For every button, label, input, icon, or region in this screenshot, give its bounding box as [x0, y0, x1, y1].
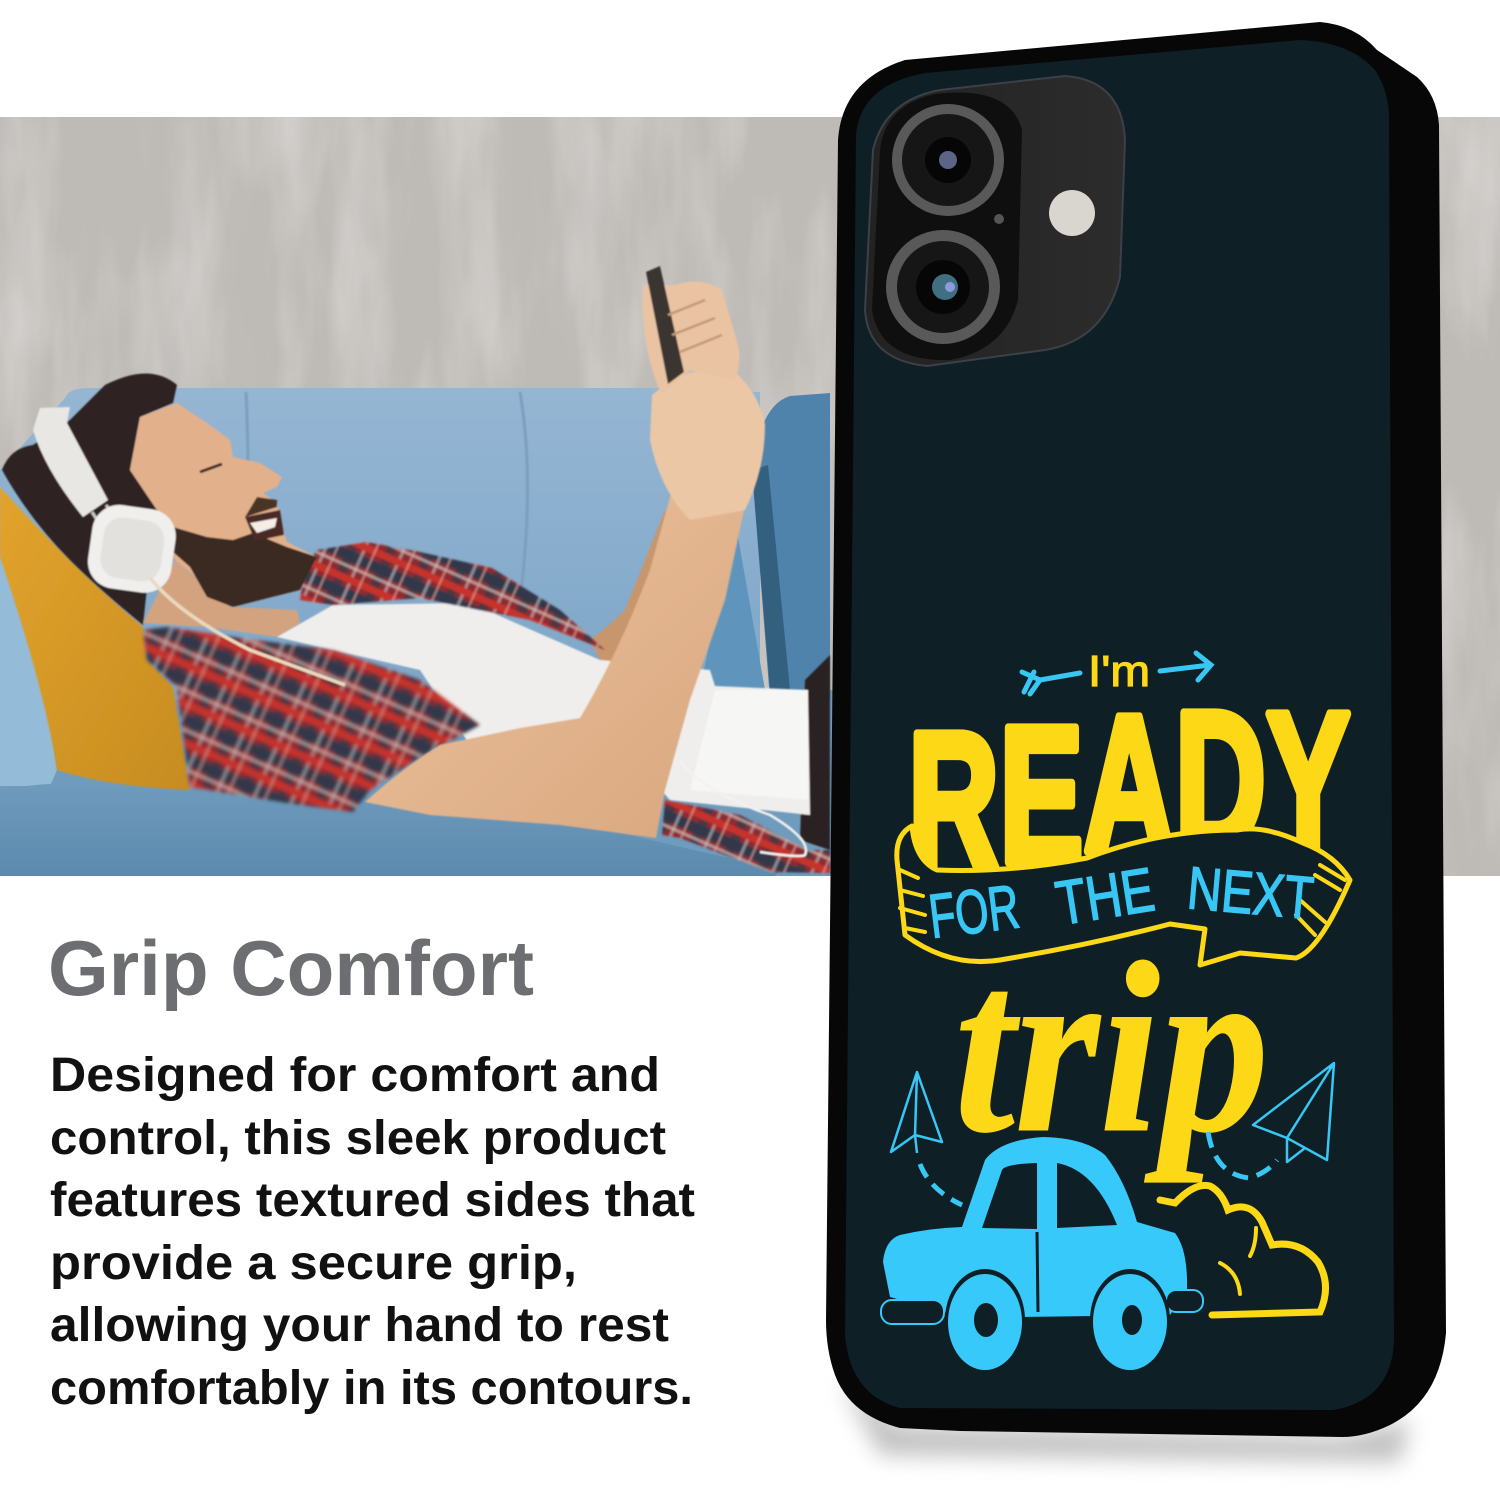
sofa [0, 388, 835, 876]
FOR THE NEXT lettering: NEXT [1185, 854, 1316, 932]
ribbon hatch [900, 865, 1345, 935]
I'm lettering: I'm [1088, 647, 1150, 696]
neck [143, 560, 300, 637]
back arm [590, 510, 700, 680]
windows [982, 1163, 1117, 1229]
lifestyle photo: man on sofa [0, 117, 1500, 876]
door line [1037, 1232, 1038, 1312]
near arm [365, 490, 745, 838]
plaid sleeve [143, 627, 480, 812]
man [2, 266, 830, 873]
microphone dot [994, 214, 1004, 224]
FOR THE NEXT lettering: FOR [925, 872, 1023, 952]
face [130, 403, 317, 607]
dashed trail right [1208, 1132, 1277, 1178]
shirt tail [662, 800, 830, 873]
FOR THE NEXT lettering [925, 854, 1316, 952]
top lens [892, 104, 1004, 216]
white t-shirt [277, 603, 810, 815]
upper hand [643, 281, 739, 395]
exhaust cloud [1160, 1185, 1326, 1315]
bottom lens [886, 230, 1000, 344]
trip lettering: trip [954, 912, 1269, 1184]
teeth [250, 518, 277, 533]
beard [157, 510, 317, 607]
description text: allowing your hand to rest [50, 1299, 669, 1352]
description text: control, this sleek product [50, 1112, 666, 1165]
moustache [245, 497, 277, 517]
lower fist [650, 370, 765, 520]
case body [826, 22, 1446, 1437]
left wheel [945, 1269, 1025, 1371]
ribbon banner [897, 826, 1350, 965]
mustard pillow [0, 487, 190, 790]
description text [50, 1049, 695, 1415]
FOR THE NEXT lettering: THE [1051, 855, 1159, 939]
case shadow [840, 1380, 1410, 1462]
lens island [872, 92, 1022, 360]
headphones [33, 407, 345, 685]
wall background [0, 117, 1500, 876]
artwork [881, 647, 1350, 1371]
description text: Designed for comfort and [50, 1049, 660, 1102]
mouth [245, 510, 284, 541]
description text: comfortably in its contours. [50, 1362, 693, 1415]
flash [1049, 190, 1095, 236]
READY lettering: READY [908, 670, 1350, 910]
camera plate [865, 76, 1125, 366]
held phone [646, 266, 684, 384]
front bumper [881, 1300, 944, 1324]
arrow right [1160, 653, 1211, 680]
dashed trail left [920, 1164, 962, 1205]
earphone cable [680, 760, 806, 856]
car [881, 1137, 1203, 1371]
shirt collar and placket [300, 542, 605, 650]
description text: provide a secure grip, [50, 1237, 577, 1290]
description text: features textured sides that [50, 1174, 695, 1227]
heading: Grip Comfort [48, 924, 534, 1012]
right wheel [1090, 1269, 1170, 1371]
car body [883, 1137, 1187, 1317]
rear bumper [1166, 1290, 1203, 1312]
paper plane left [891, 1072, 942, 1153]
phone case [826, 22, 1446, 1462]
arrow left [1022, 672, 1080, 694]
paper plane right [1253, 1063, 1334, 1162]
jeans [800, 655, 830, 850]
fingers [668, 300, 722, 352]
printed back panel [845, 40, 1394, 1410]
hair [2, 374, 177, 625]
eye [200, 464, 222, 472]
camera module [865, 76, 1125, 366]
